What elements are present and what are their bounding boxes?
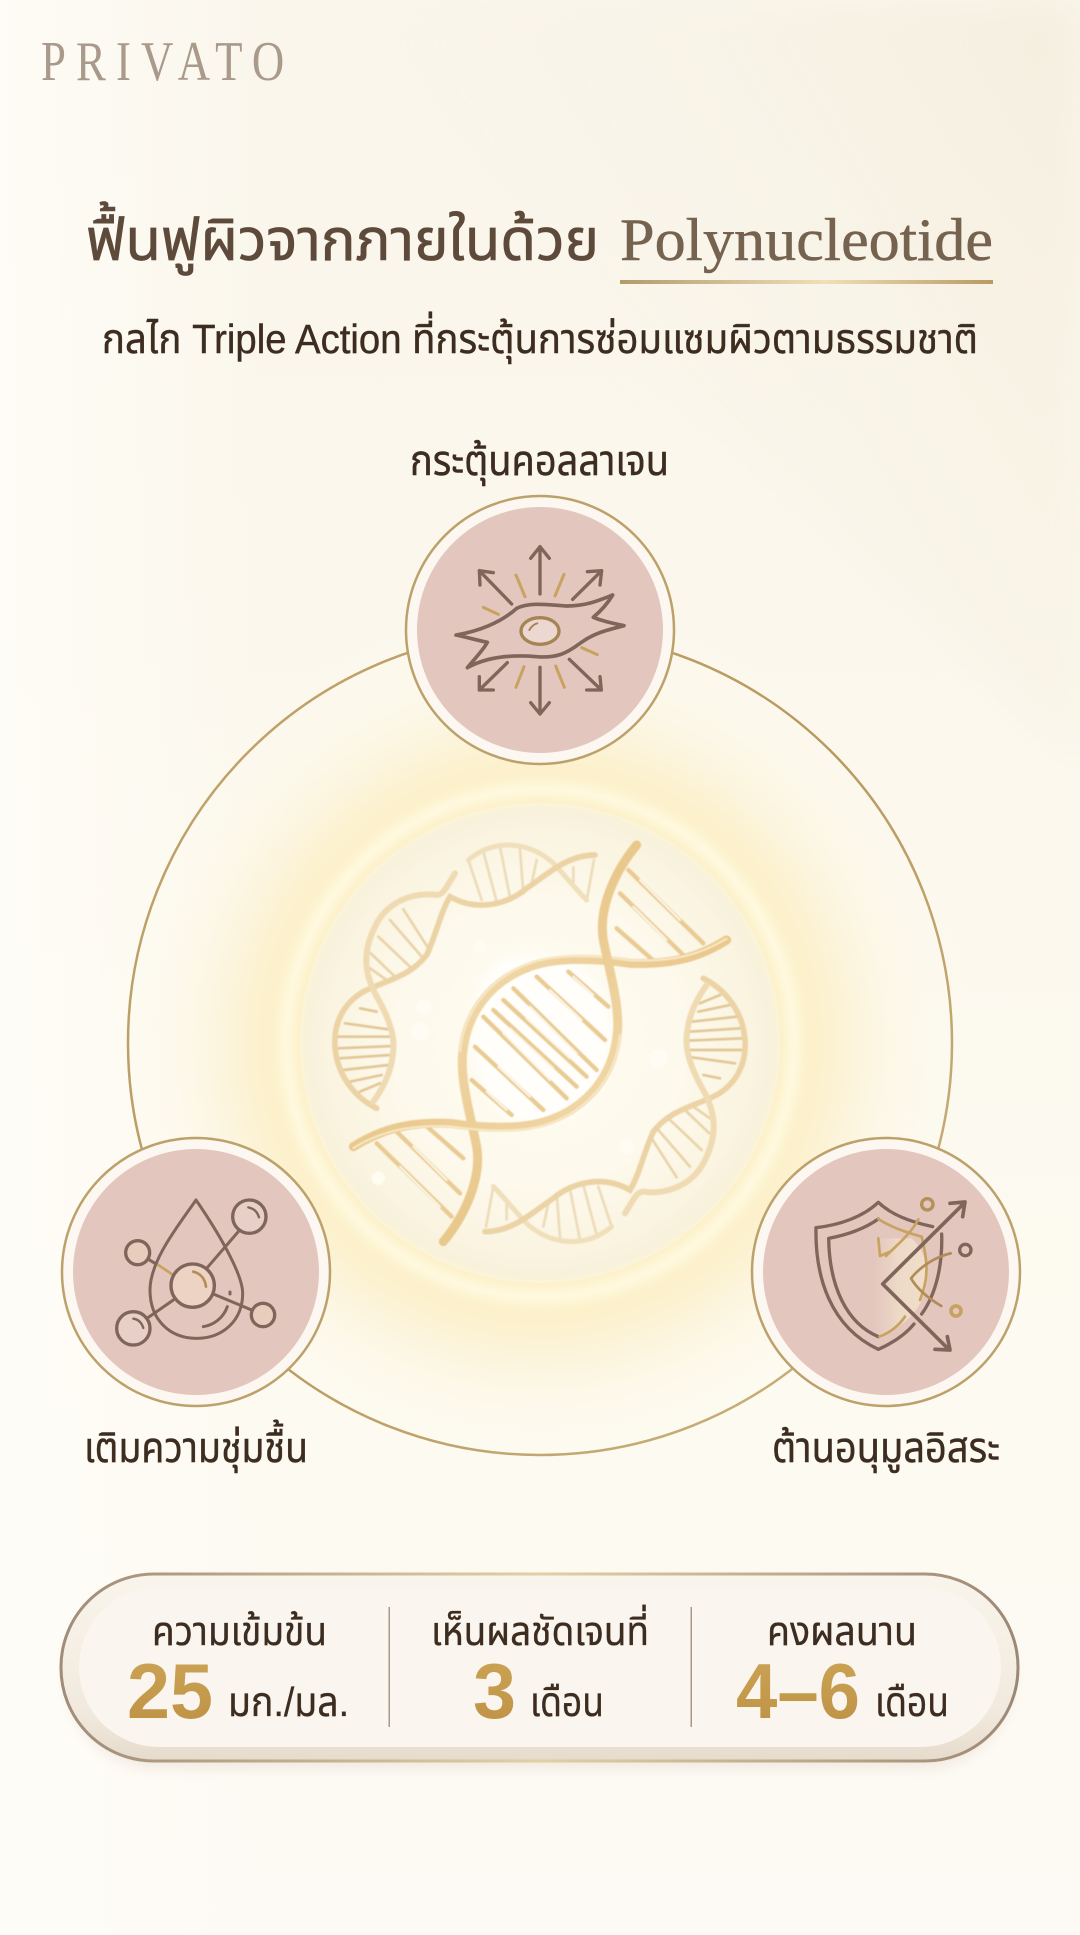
hydration label: เติมความชุ่มชื้น xyxy=(84,1419,308,1473)
results unit: เดือน xyxy=(530,1679,604,1725)
hydration pink disc xyxy=(73,1149,319,1395)
stats panel xyxy=(61,1574,1018,1770)
antioxidant pink disc xyxy=(763,1149,1009,1395)
concentration value: 25 xyxy=(127,1647,213,1735)
central bubble xyxy=(286,789,794,1297)
title underline xyxy=(620,280,993,284)
concentration unit: มก./มล. xyxy=(228,1679,349,1725)
duration unit: เดือน xyxy=(875,1679,949,1725)
bubble inner light xyxy=(473,955,611,1124)
sparkle dots xyxy=(372,940,668,1185)
collagen circle xyxy=(406,496,674,764)
antioxidant circle xyxy=(752,1138,1020,1406)
duration value: 4–6 xyxy=(736,1647,860,1735)
panel inner face xyxy=(79,1587,1001,1747)
collagen label: กระตุ้นคอลลาเจน xyxy=(410,437,669,486)
title Polynucleotide: Polynucleotide xyxy=(620,207,993,273)
stat: concentration xyxy=(127,1610,349,1735)
hydration circle xyxy=(62,1138,330,1406)
logo: PRIVATO: PRIVATO xyxy=(41,30,284,92)
large ring xyxy=(128,631,952,1455)
antioxidant label: ต้านอนุมูลอิสระ xyxy=(772,1424,1000,1473)
concentration label: ความเข้มข้น xyxy=(152,1610,327,1654)
background top-right streak xyxy=(260,0,1080,760)
node: antioxidant xyxy=(752,1138,1020,1473)
icon: droplet with molecules xyxy=(117,1200,275,1345)
bubble body xyxy=(300,803,780,1283)
DNA helix xyxy=(335,845,745,1242)
subtitle: กลไก Triple Action ที่กระตุ้นการซ่อมแซมผิวตามธรรมชาติ xyxy=(102,311,978,364)
title Thai part: ฟื้นฟูผิวจากภายในด้วย xyxy=(86,201,599,275)
glow around bubble xyxy=(100,603,980,1483)
panel outer frame xyxy=(61,1574,1018,1761)
icon: fibroblast cell with arrows xyxy=(456,547,624,714)
node: hydration xyxy=(62,1138,330,1473)
divider 2 xyxy=(690,1607,692,1727)
title xyxy=(86,201,993,284)
panel soft shadow xyxy=(66,1585,1014,1770)
node: collagen xyxy=(406,437,674,764)
bubble glow ring xyxy=(286,789,794,1297)
stat: visible results xyxy=(431,1604,649,1735)
divider 1 xyxy=(388,1607,390,1727)
icon: shield deflecting arrows xyxy=(816,1199,971,1350)
collagen pink disc xyxy=(417,507,663,753)
results label: เห็นผลชัดเจนที่ xyxy=(431,1604,649,1654)
duration label: คงผลนาน xyxy=(767,1610,917,1654)
results value: 3 xyxy=(473,1647,516,1735)
stat: duration xyxy=(736,1610,949,1735)
